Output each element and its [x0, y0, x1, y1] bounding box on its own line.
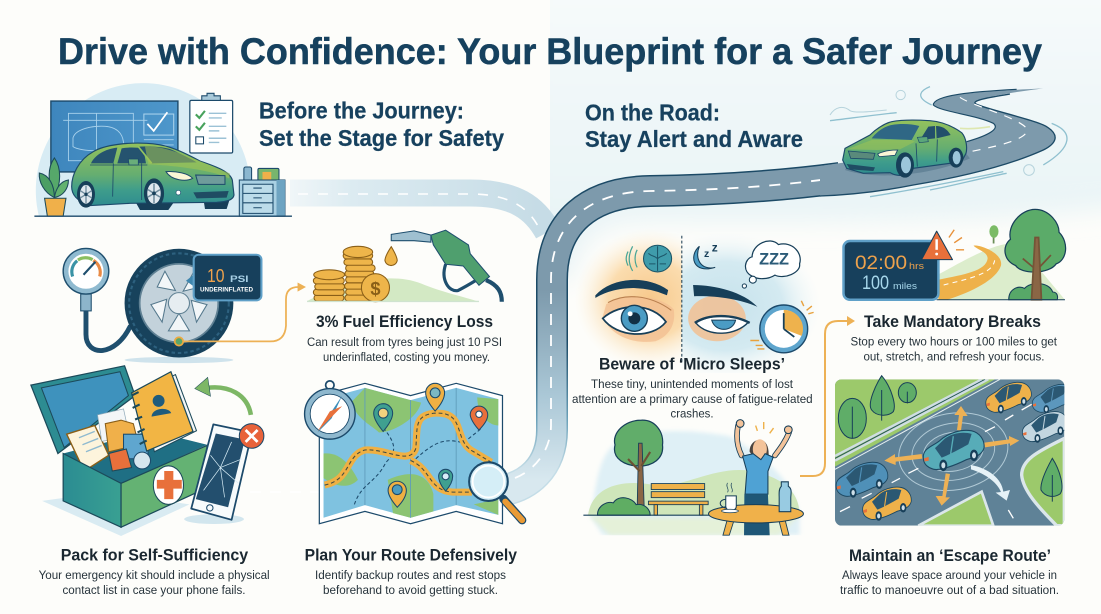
panel: plan your route defensively: Identify backup routes and rest stops: [315, 568, 506, 582]
illustration: car in garage with blueprint and checklist: [34, 83, 292, 217]
panel: pack for self-sufficiency: Pack for Self-Sufficiency: [61, 546, 249, 564]
panel: plan your route defensively: Plan Your Route Defensively: [305, 546, 518, 564]
icon: alert eye versus sleepy eye: [582, 236, 814, 370]
panel: 3% fuel efficiency loss: underinflated, costing you money.: [323, 350, 490, 364]
panel: pack for self-sufficiency: [31, 366, 270, 597]
road swirl at top right: [820, 87, 1067, 197]
illustration: car with buffer zone in traffic: [835, 376, 1075, 526]
sleepy eye: [688, 285, 757, 341]
stretching person: [736, 420, 792, 535]
panel: beware of micro sleeps: These tiny, unintended moments of lost: [591, 377, 794, 391]
icon: moon and zzz cloud: z: [704, 248, 709, 260]
illustration: park rest scene with stretching person: [583, 420, 803, 535]
panel: pack for self-sufficiency: Your emergency kit should include a physical: [39, 568, 270, 582]
panel: 3% fuel efficiency loss: PSI: [230, 274, 248, 285]
icon: coin stacks and fuel nozzle: [307, 230, 502, 302]
icon: brain and sound waves: [626, 245, 672, 272]
panel: take mandatory breaks: Stop every two hours or 100 miles to get: [850, 334, 1058, 348]
panel: 3% fuel efficiency loss: Can result from tyres being just 10 PSI: [307, 335, 502, 349]
panel: beware of micro sleeps: [572, 229, 821, 535]
traffic cars: [836, 382, 1075, 521]
warning triangle: [922, 230, 964, 260]
panel: take mandatory breaks: 100: [862, 273, 889, 294]
clipboard and supplies: [67, 409, 151, 471]
icon: cracked phone: [184, 424, 264, 524]
panel: take mandatory breaks: [844, 209, 1066, 364]
icon: green parked car: [72, 143, 234, 210]
decorative blue wash behind the road: [550, 22, 1101, 278]
icon: blueprint board: [51, 101, 178, 172]
panel: take mandatory breaks: hrs: [909, 261, 925, 271]
icon: drawer cabinet with supplies: [239, 167, 285, 216]
panel: pack for self-sufficiency: contact list in case your phone fails.: [62, 583, 246, 597]
callout: 10 PSI underinflated: [186, 255, 261, 300]
panel: beware of micro sleeps: Beware of ‘Micro Sleeps’: [599, 356, 785, 374]
ground line: [34, 214, 292, 218]
panel: maintain an escape route: Always leave space around your vehicle in: [842, 568, 1057, 582]
road: winding path connecting all sections: [245, 87, 1067, 492]
panel: take mandatory breaks: 02:00: [855, 253, 907, 274]
panel: beware of micro sleeps: crashes.: [670, 406, 714, 420]
alert eye: [596, 280, 674, 342]
panel: maintain an escape route: [835, 376, 1075, 597]
panel: on the road heading: Stay Alert and Aware: [585, 126, 803, 152]
icon: tyre with pressure gauge: [63, 230, 502, 363]
panel: maintain an escape route: traffic to manoeuvre out of a bad situation.: [840, 583, 1059, 597]
table with coffee and water: [709, 482, 803, 535]
compass: [305, 381, 355, 439]
direction arrows: [884, 406, 1019, 506]
arrow: orange connector from rest scene to breaks: [800, 316, 855, 476]
icon: moon and zzz cloud: [694, 241, 800, 288]
tree: [1005, 209, 1066, 300]
icon: folded map with compass and magnifier: [305, 381, 522, 524]
icon: checklist clipboard: [190, 93, 233, 153]
panel: 3% fuel efficiency loss: 3% Fuel Efficiency Loss: [316, 313, 493, 331]
arrow: green curved arrow: [195, 377, 251, 415]
title: Drive with Confidence: Your Blueprint for a Safer Journey: [58, 31, 1042, 72]
contact book: [132, 372, 197, 452]
panel: 3% fuel efficiency loss: 10: [207, 266, 224, 286]
icon: emergency kit with contact book and broken phone: [31, 366, 264, 536]
panel: on the road heading: [585, 100, 803, 152]
icon: pressure gauge: [63, 248, 109, 311]
panel: plan your route defensively: [305, 381, 522, 597]
panel: maintain an escape route: Maintain an ‘Escape Route’: [849, 547, 1051, 565]
timer display: [844, 241, 938, 300]
magnifying glass: [469, 462, 522, 520]
bench: [648, 484, 708, 515]
panel: before the journey heading: Before the Journey:: [259, 98, 464, 124]
panel: 3% fuel efficiency loss: UNDERINFLATED: [200, 287, 253, 294]
map pins: [374, 383, 488, 507]
panel: 3% fuel efficiency loss: [63, 230, 502, 364]
panel: plan your route defensively: beforehand to avoid getting stuck.: [323, 583, 498, 597]
panel: take mandatory breaks: miles: [893, 281, 917, 292]
icon: moon and zzz cloud: ZZZ: [759, 250, 789, 269]
icon: timer display and winding road with tree: [844, 209, 1066, 300]
arrow: orange connector: [183, 282, 306, 341]
panel: take mandatory breaks: out, stretch, and refresh your focus.: [864, 350, 1044, 364]
panel: before the journey heading: Set the Stage for Safety: [259, 125, 504, 151]
panel: 3% fuel efficiency loss: $: [370, 278, 381, 299]
icon: driving green car: [843, 120, 970, 178]
panel: on the road heading: On the Road:: [585, 100, 720, 126]
tree: [597, 420, 663, 515]
panel: take mandatory breaks: Take Mandatory Breaks: [864, 313, 1041, 331]
icon: clock: [750, 301, 814, 353]
panel: before the journey heading: [259, 98, 504, 151]
icon: potted plant: [39, 158, 68, 216]
icon: moon and zzz cloud: z: [712, 241, 718, 255]
panel: beware of micro sleeps: attention are a primary cause of fatigue-related: [572, 392, 813, 406]
roadside trees: [838, 383, 1062, 502]
